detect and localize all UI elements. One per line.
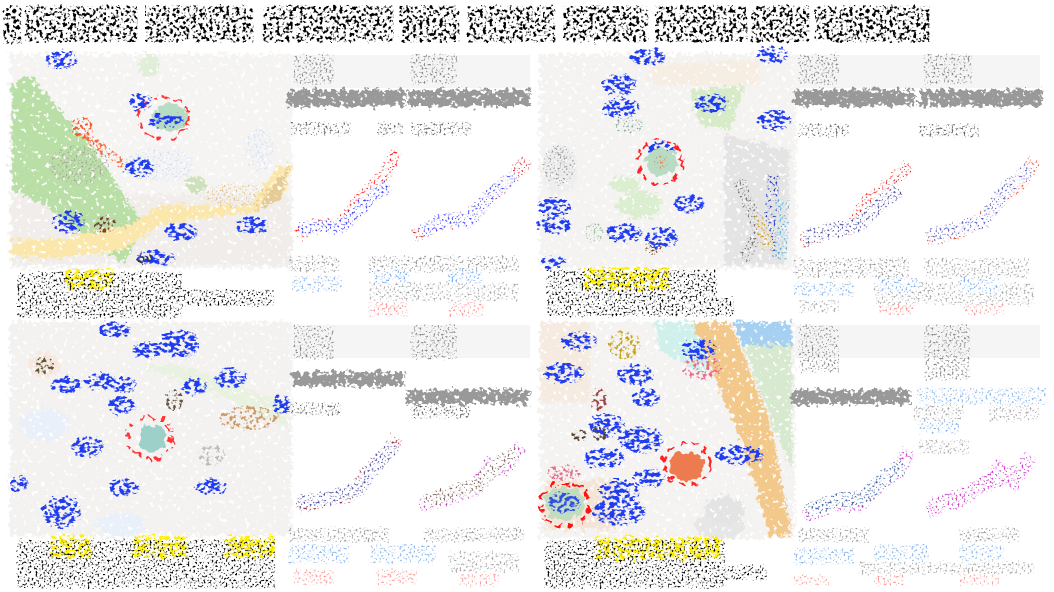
footnote block bbox=[18, 269, 275, 318]
icon: outlined region bbox=[128, 417, 172, 459]
line chart: left bbox=[298, 152, 398, 236]
line chart: right bbox=[415, 160, 528, 236]
highlight regions: pink bbox=[548, 356, 723, 481]
band: grey headers bbox=[795, 90, 1042, 106]
map: bottom-left bbox=[10, 322, 292, 537]
map: bottom-right bbox=[540, 322, 795, 539]
icon: outlined region bbox=[638, 140, 682, 184]
line chart: right bbox=[928, 455, 1032, 510]
small panel: header blocks bbox=[290, 54, 530, 88]
line chart: right bbox=[420, 446, 522, 506]
icon: outlined region bbox=[139, 97, 189, 139]
line chart: left bbox=[802, 165, 910, 242]
small multiples bbox=[795, 258, 1035, 315]
small multiples bbox=[290, 528, 525, 586]
small multiples: upper bbox=[915, 388, 1048, 454]
footnote block bbox=[546, 537, 768, 588]
line chart: left bbox=[805, 450, 910, 515]
title bbox=[4, 6, 930, 44]
labels: chart captions bbox=[800, 124, 980, 137]
route lines bbox=[740, 175, 785, 260]
labels: chart captions bbox=[292, 403, 472, 418]
marker clusters: blue bbox=[46, 51, 269, 265]
small panel: header blocks bbox=[290, 325, 530, 359]
band: grey header bbox=[792, 390, 910, 404]
line chart: right bbox=[928, 160, 1036, 240]
footnote block bbox=[18, 536, 276, 588]
small multiples bbox=[290, 256, 520, 316]
panel: bottom-left bbox=[10, 322, 530, 588]
small panel: header blocks bbox=[795, 325, 1040, 380]
panel: top-right bbox=[538, 47, 1042, 316]
small panel: header blocks bbox=[795, 54, 1040, 88]
band: grey headers bbox=[292, 372, 530, 404]
icon: outlined region bbox=[541, 483, 589, 527]
panel: bottom-right bbox=[540, 322, 1048, 588]
marker clusters: orange and brown bbox=[70, 118, 153, 264]
marker clusters: blue bbox=[545, 332, 765, 526]
band: grey headers bbox=[288, 90, 530, 106]
footnote block bbox=[548, 268, 735, 316]
panel: top-left bbox=[10, 51, 530, 318]
marker clusters: mixed bbox=[572, 331, 641, 441]
marker clusters: blue bbox=[538, 47, 792, 268]
marker clusters: blue bbox=[11, 322, 291, 527]
marker clusters: mixed bbox=[544, 117, 665, 255]
map: top-left bbox=[10, 51, 292, 268]
marker clusters: mixed bbox=[35, 357, 280, 465]
small multiples: lower bbox=[795, 528, 1035, 585]
icon: outlined orange region bbox=[664, 443, 710, 485]
labels: chart captions bbox=[292, 122, 472, 135]
map: top-right bbox=[538, 47, 796, 268]
line chart: left bbox=[298, 438, 398, 507]
map details: faint noise bbox=[50, 128, 275, 207]
